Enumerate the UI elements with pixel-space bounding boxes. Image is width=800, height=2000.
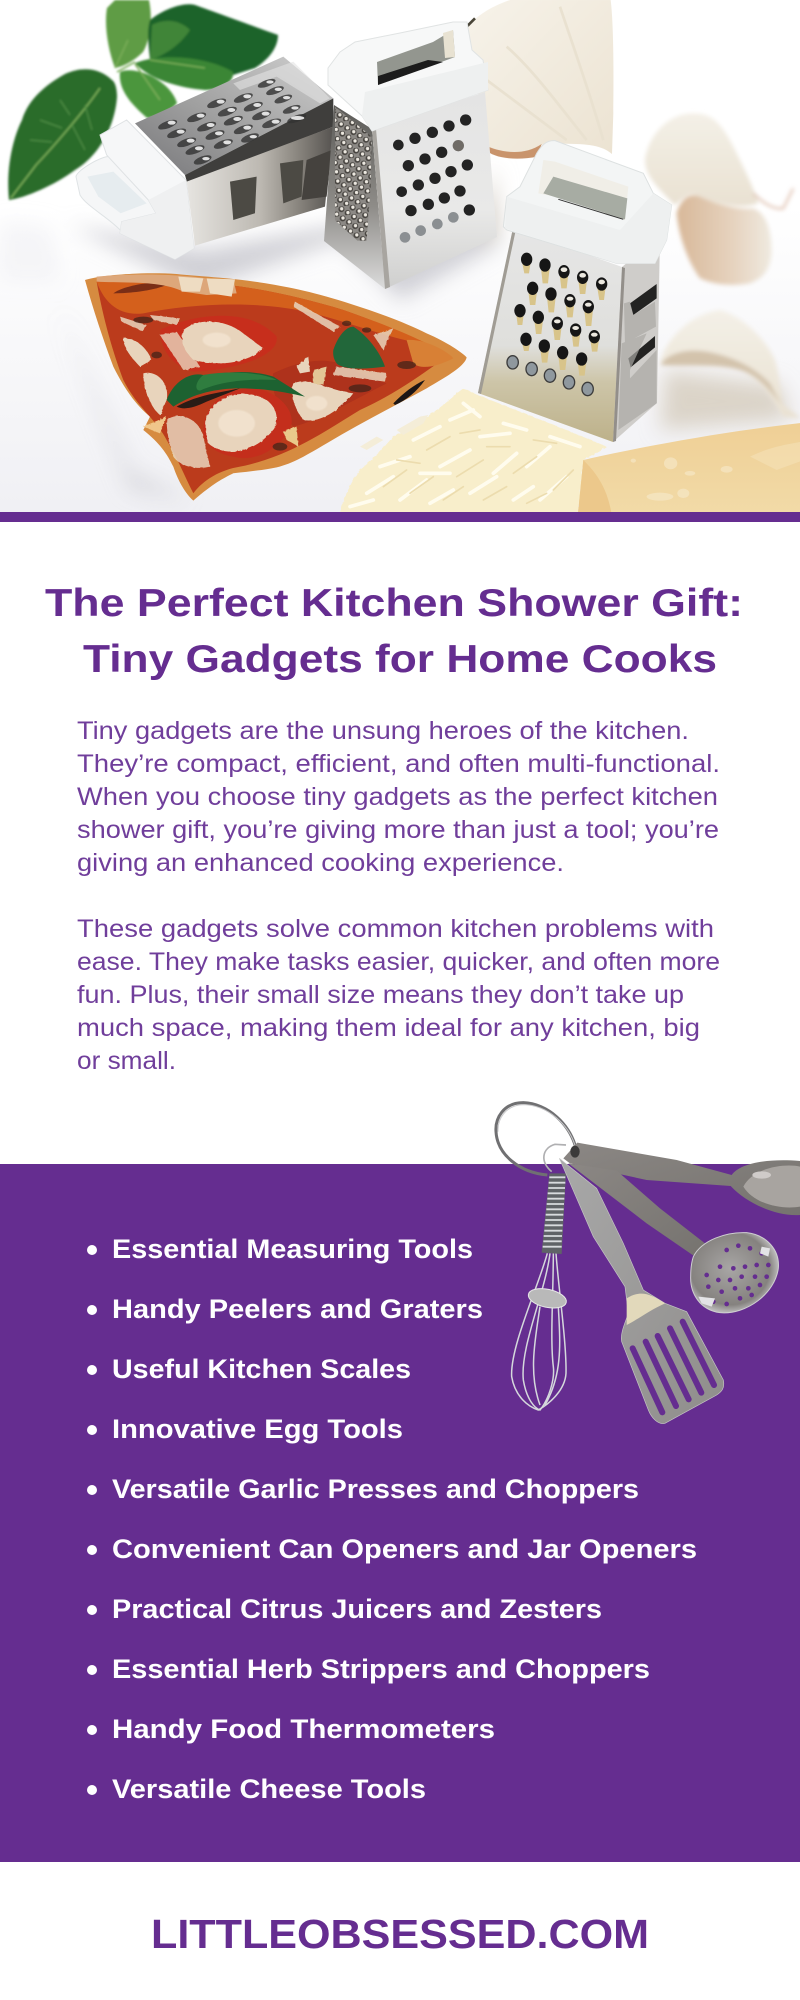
- bullet list of gadgets: Useful Kitchen Scales: [112, 1354, 411, 1384]
- bullet list of gadgets: Handy Food Thermometers: [112, 1714, 495, 1744]
- key ring: [496, 1103, 577, 1175]
- crust and sauce: [85, 273, 467, 501]
- cheese wedge: [577, 422, 800, 527]
- spatula: [559, 1158, 724, 1424]
- basil on pizza: [167, 327, 385, 408]
- bullet list of gadgets: Versatile Garlic Presses and Choppers: [112, 1474, 639, 1504]
- front grater cap: [503, 141, 672, 263]
- intro paragraph 1: Tiny gadgets are the unsung heroes of the kitchen.: [77, 717, 689, 745]
- intro paragraph 1: They’re compact, efficient, and often multi-functional.: [77, 750, 720, 778]
- bullet list of gadgets: Practical Citrus Juicers and Zesters: [112, 1594, 602, 1624]
- intro paragraph 2: ease. They make tasks easier, quicker, and often more: [77, 948, 720, 976]
- intro paragraph 1: When you choose tiny gadgets as the perfect kitchen: [77, 783, 718, 811]
- grater: standing behind: [324, 22, 497, 289]
- grater: front: [478, 141, 672, 442]
- intro paragraph 2: much space, making them ideal for any kitchen, big: [77, 1014, 700, 1042]
- title: The Perfect Kitchen Shower Gift:: [45, 582, 743, 625]
- purple divider bar under hero: [0, 512, 800, 522]
- whisk: [512, 1173, 568, 1410]
- intro paragraph 1: [77, 717, 720, 877]
- title: Tiny Gadgets for Home Cooks: [83, 638, 717, 681]
- panel: purple list background: [0, 1164, 800, 1862]
- garlic bulb: [463, 0, 614, 159]
- bullet list of gadgets: [87, 1234, 697, 1804]
- spoon: [563, 1143, 800, 1215]
- intro paragraph 1: shower gift, you’re giving more than just a tool; you’re: [77, 816, 719, 844]
- intro paragraph 2: These gadgets solve common kitchen problems with: [77, 915, 714, 943]
- footer website name: LITTLEOBSESSED.COM: [151, 1911, 649, 1957]
- intro paragraph 1: giving an enhanced cooking experience.: [77, 849, 564, 877]
- skimmer spoon: [568, 1163, 778, 1313]
- basil leaves: [8, 0, 278, 200]
- bullet list of gadgets: Innovative Egg Tools: [112, 1414, 403, 1444]
- bullet list of gadgets: Convenient Can Openers and Jar Openers: [112, 1534, 697, 1564]
- grater: lying on its side: [76, 57, 333, 259]
- soft shadows: [0, 165, 790, 500]
- icon: miniature utensils on a key ring: [494, 1101, 800, 1424]
- intro paragraph 2: [77, 915, 720, 1075]
- bullet list of gadgets: Essential Measuring Tools: [112, 1234, 473, 1264]
- bullet list of gadgets: Essential Herb Strippers and Choppers: [112, 1654, 650, 1684]
- pizza slice: [85, 273, 467, 501]
- garlic cloves: [645, 113, 800, 418]
- grated cheese pile: [337, 388, 607, 527]
- bullet list of gadgets: Versatile Cheese Tools: [112, 1774, 426, 1804]
- intro paragraph 2: or small.: [77, 1047, 176, 1075]
- intro paragraph 2: fun. Plus, their small size means they don’t take up: [77, 981, 684, 1009]
- bullet list of gadgets: Handy Peelers and Graters: [112, 1294, 483, 1324]
- melted cheese: [120, 302, 393, 468]
- title: [45, 582, 743, 681]
- hero photo: graters, pizza, garlic, basil, cheese: [0, 0, 800, 512]
